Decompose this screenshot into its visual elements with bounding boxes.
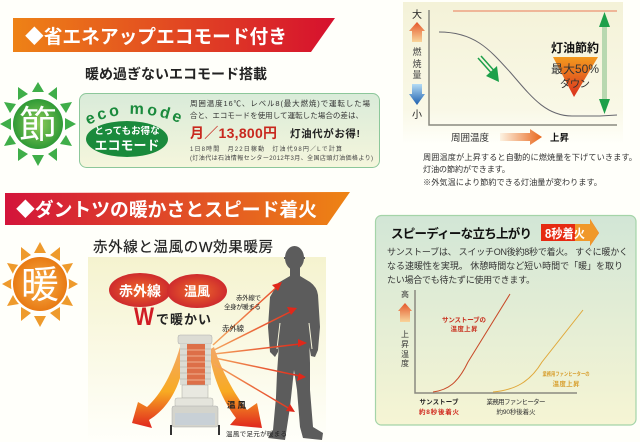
chart: temperature rise: 度 [401,358,409,368]
panel: heater and person diagram [88,246,326,442]
heater [170,335,220,435]
double arrow: savings range [599,12,610,114]
chart: temperature rise: 温 [401,350,409,359]
person silhouette [268,246,323,440]
curve labels: 温度上昇 [552,379,580,388]
infrared arrows [213,282,307,412]
description [387,246,628,285]
tag: 8 second ignition: 8秒着火 [545,226,585,241]
y axis labels: 量 [412,70,422,80]
green arrow: decreasing [478,56,499,82]
ovals: infrared and warm air: 温風 [184,284,210,299]
savings description: 周囲温度16℃、レベル8(最大燃焼)で運転した場 [190,98,370,108]
savings description: 合と、エコモードを使用して運転した場合の差は、 [190,110,363,120]
x axis labels [419,397,546,416]
ovals: infrared and warm air: 赤外線 [119,283,161,299]
sun stove curve [433,294,510,392]
savings label [551,40,599,97]
subheading: eco mode: 暖め過ぎないエコモード搭載 [85,66,267,82]
ovals: infrared and warm air [109,273,227,308]
icon: orange sun 暖 [2,242,78,327]
savings label: 灯油節約 [551,40,599,55]
callout labels: 温風 [227,400,246,410]
y axis labels: 大 [412,8,422,21]
description: サンストーブは、 スイッチON後約8秒で着火。 すぐに暖かく [387,246,628,257]
chart: temperature rise: 高 [401,289,409,299]
footnote: 1日8時間 月22日稼動 灯油代98円／Lで計算 [190,145,342,153]
eco mode logo: とってもお得な [94,125,160,137]
savings label: 最大50% [551,62,599,76]
callout labels: 全身が暖まる [224,302,261,311]
x axis labels: サンストーブ [420,397,459,406]
heading: スピーディーな立ち上がり [391,226,532,241]
W warm label: で暖かい [156,312,211,327]
banner: eco mode heading [13,18,335,52]
description: たい場合でも待たずに使用できます。 [387,274,535,285]
curve labels [442,315,590,388]
burn curve [439,32,617,116]
icon: green sun 節: 節 [19,105,57,147]
curve labels: 業務用ファンヒーターの [542,370,590,378]
y axis labels [409,8,425,121]
footnote: (灯油代は石油情報センター2012年3月、全国店頭灯油価格より) [190,154,373,162]
chart: temperature rise [398,289,590,416]
y axis labels: 焼 [412,59,422,69]
chart: burn amount vs ambient temperature [403,2,623,145]
x axis labels: 周囲温度 [451,132,489,144]
y axis labels: 燃 [412,46,422,57]
banner: eco mode heading: ◆省エネアップエコモード付き [25,26,287,48]
panel: speedy ignition [376,216,636,425]
x axis labels: 上昇 [550,132,570,144]
eco mode logo [86,105,181,157]
x axis labels: 約8秒後着火 [419,407,460,416]
banner: warmth and speed heading [5,192,350,225]
curve labels: 温度上昇 [450,324,478,333]
callout labels: 温風で足元が暖まる [226,429,287,438]
x axis labels: 約90秒後着火 [496,407,536,416]
text: burn explanation: 灯油の節約ができます。 [423,164,510,174]
warm air arrows [132,347,262,428]
W warm label [134,303,211,331]
callout labels: 赤外線で [236,293,262,302]
savings label: ダウン [560,77,590,90]
description: なる速暖性を実現。 休憩時間など短い時間で「暖」を取り [387,260,623,271]
subheading: infrared and warm air: 赤外線と温風のW効果暖房 [93,239,273,256]
eco mode logo: エコモード [94,138,160,153]
eco mode logo: eco mode [86,105,181,124]
chart: temperature rise: 昇 [401,340,409,349]
tag: 8 second ignition [541,219,599,246]
savings caption: 灯油代がお得! [290,127,360,140]
text: burn explanation: 周囲温度が上昇すると自動的に燃焼量を下げていきます。 [423,152,637,162]
chart: temperature rise: 上 [401,330,409,339]
text: burn explanation: ※外気温により節約できる灯油量が変わります。 [423,177,602,187]
text: burn explanation [423,152,637,187]
savings description [190,98,370,120]
savings amount: 月／13,800円 [190,125,277,141]
x axis labels: 業務用ファンヒーター [486,397,546,406]
panel: eco mode savings [79,93,380,168]
curve labels: サンストーブの [442,315,486,324]
icon: orange sun 暖: 暖 [21,265,59,307]
icon: green sun 節 [0,82,76,166]
fan heater curve [493,310,583,392]
banner: warmth and speed heading: ◆ダントツの暖かさとスピード着火 [16,198,317,221]
x axis labels [451,129,570,145]
footnote [190,145,373,162]
y axis labels: 小 [412,109,422,121]
callout labels: 赤外線 [222,323,244,333]
callout labels [222,293,287,438]
W warm label: W [134,303,154,331]
